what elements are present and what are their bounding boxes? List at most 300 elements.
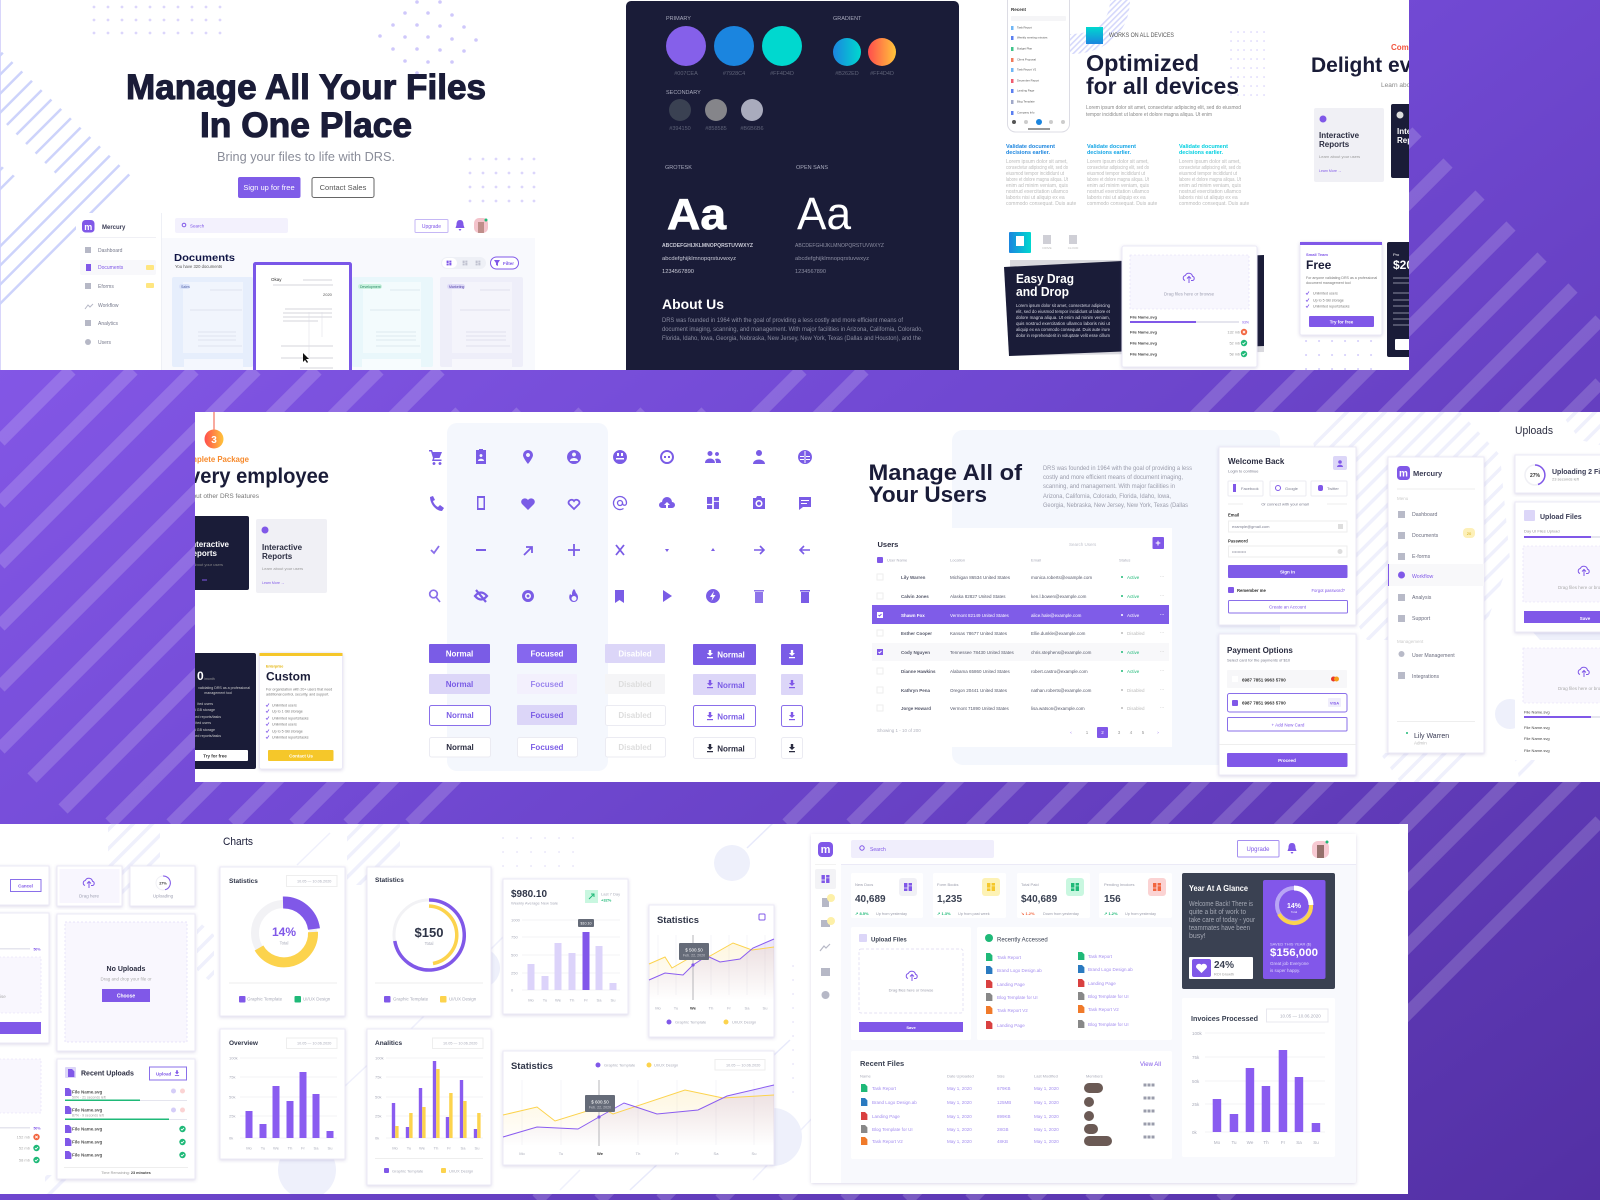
icon: arrow left [800,546,810,554]
recently accessed: Task Report V2 [1088,1007,1119,1012]
sidebar menu: Workflow [98,303,119,309]
row: Cody Nguyen: chris.stephens@example.com [1031,650,1092,655]
row: Jorge Howard: Vermont 71890 United States [950,706,1010,711]
invoices processed: 0k [1192,1130,1198,1135]
row: Jorge Howard [877,705,1164,711]
chart card: analytics: 50k [375,1094,381,1100]
document card: development: Development [360,285,381,289]
row: Lily Warren: Michigan 86534 United States [950,575,1011,580]
ROI tile: ROI Growth [1214,972,1234,976]
optimized body: Lorem ipsum dolor sit amet, consectetur adipiscing elit, sed do eiusmod [1086,105,1241,111]
recent files table: 28GB [997,1127,1009,1132]
row: Kathryn Pena: nathan.roberts@example.com [1031,688,1092,693]
pricing card: pro dark: ited users [197,702,213,706]
login card: Facebook [1241,486,1259,491]
phone mock: Blog Template [1017,100,1035,104]
row: Cody Nguyen: Active [1127,650,1140,655]
typeface: grotesk [662,165,754,275]
chart card: statistics rings: Graphic Template [393,996,429,1002]
chart card: statistics rings: UI/UX Design [449,996,477,1002]
feature column 2: commodo consequat. Duis aute [1087,201,1158,207]
typeface: open sans: ABCDEFGHIJKLMNOPQRSTUVWXYZ [795,243,885,249]
recent files table: Last Modified [1034,1074,1058,1078]
pricing card: enterprise: Up to 1 GB storage [272,710,303,714]
dashboard upload files: Save [906,1025,916,1030]
stat card: new docs: 40,689 [855,894,886,905]
icon: face [660,450,674,464]
feature column 2: nostrud exercitation ullamco [1087,189,1149,195]
card: interactive reports dark: Interactive [1397,127,1438,136]
pricing card: pro clipped [1387,242,1427,357]
icon: cart [429,450,442,465]
sidebar card: Admin [1414,740,1427,746]
pricing card: pro dark: ited reports/tasks [194,715,221,719]
chart card: weekly average sales: Th [570,998,574,1002]
recent files table: Name [860,1074,871,1078]
documents count: You have 320 documents [175,264,222,269]
card: cancel: Cancel [18,884,33,888]
button: sign up: Sign up for free [243,183,295,192]
typeface: open sans: abcdefghijklmnopqrstuvwxyz [795,256,869,262]
chart card: statistics rings [367,867,491,1016]
about us: About Us [662,296,724,312]
payment options card: Select card for the payments of $10 [1227,658,1291,662]
upload files card: Save [1580,616,1591,621]
row: Calvin Jones: ··· [1160,593,1164,598]
invoices processed: Tu [1231,1140,1237,1145]
upload card: 58 mb [1229,352,1240,356]
bar chart: overview [246,1072,334,1138]
recent files table: May 1, 2020 [947,1100,972,1105]
phone mock: Task Report V2 [1017,68,1037,72]
feature column 2: consectetur adipiscing elit, sed do [1087,165,1149,171]
heading: manage users [868,460,1023,507]
chart card: statistics donut: Total [280,940,288,946]
chart card: statistics small line [649,905,774,1037]
upload card: Drag files here or browse [1164,292,1215,296]
pagination: ‹ [1070,730,1072,735]
pricing card: free: Unlimited users [1313,292,1338,296]
dashboard upload files: Drag files here or browse [889,988,934,992]
typeface: open sans: OPEN SANS [796,165,828,171]
dashboard sidebar [811,834,841,1183]
users table: Users [878,540,898,549]
pricing card: enterprise: Up to 5 GB storage [272,730,303,734]
card: interactive reports light: Learn More → [1319,169,1341,173]
users table: User Name [887,558,908,562]
document card: marketing [440,277,523,370]
column: icon and label: Normal [717,650,745,660]
pagination [877,727,1159,738]
recent files table: 48KB [997,1139,1008,1144]
savings tile: $156,000 [1270,947,1318,959]
sidebar card: Analysis [1412,595,1432,601]
upload status card [1515,455,1600,493]
row: Kathryn Pena: Kathryn Pena [901,688,931,693]
card: recent uploads: File Name.svg [72,1090,103,1094]
phone mock: Recent [1011,7,1027,12]
card: no uploads: Choose [117,994,135,1000]
feature column 2: laboris nisi ut aliquip ex ea [1087,195,1146,201]
pricing card: pro clipped: $20 [1393,258,1413,272]
sidebar menu: Users [98,340,112,346]
document card: development [352,277,433,370]
heading: optimized: for all devices [1086,73,1239,99]
stat card: form books: 1,235 [937,894,962,905]
dot grid top [93,6,221,34]
row: Calvin Jones: Active [1127,594,1140,599]
upload card: File Name.svg [1130,340,1157,346]
feature column 3: laboris nisi ut aliquip ex ea [1179,195,1238,201]
chart card: statistics small line: We [690,1006,697,1010]
card: upload progress clipped: ise [0,994,6,999]
card: interactive reports light: Learn about your users [1319,154,1360,159]
sidebar menu [80,237,156,346]
dot diamond [378,0,478,75]
invoices processed [1182,998,1335,1157]
card: interactive reports light: Reports [1319,140,1350,149]
secondary colours: #B6B6B6 [740,126,764,132]
invoices processed: Th [1263,1140,1269,1145]
tooltip: $ 500.50 [685,948,703,952]
sidebar card: Menu [1397,496,1409,501]
recently accessed: Task Report V2 [997,1008,1028,1013]
invoices processed: Sa [1296,1140,1302,1145]
pagination: › [1157,730,1159,735]
donut chart [255,902,314,962]
row: Lily Warren: Active [1127,575,1140,580]
ring chart [394,900,464,970]
chart card: statistics donut: Graphic Template [247,996,283,1002]
column: disabled: Disabled [618,743,652,752]
year at a glance [1182,873,1335,989]
recently accessed: Brand Logo Design.ab [997,968,1042,973]
chart card: statistics wide line: Graphic Template [604,1062,636,1068]
users paragraph: scanning, and management. With major facilities in [1043,483,1175,490]
recent files table: 899KB [997,1114,1011,1119]
title [128,73,486,138]
chart card: weekly average sales: 500 [511,952,518,958]
row: Shawn Fox selected: Vermont 82149 United States [950,613,1010,618]
pricing card: pro dark [160,653,256,769]
pagination: 1 [1086,730,1089,735]
gradient colours: GRADIENT [833,16,862,22]
typeface: open sans: Aa [797,188,852,239]
dashboard header [841,834,1356,865]
card: upload progress clipped: 50% [33,948,41,952]
chart card: overview: 0k [229,1136,233,1140]
heading: optimized: Optimized [1086,50,1199,76]
users table: Location [950,558,965,562]
easy drag and drop dark block: elit, sed do eiusmod tempor incididunt ut labore et [1016,309,1111,315]
delight heading clipped [1311,43,1546,89]
row: Shawn Fox selected: alice.hale@example.com [1031,613,1082,618]
chart card: overview: 10.05 — 10.06.2020 [297,1042,331,1046]
chart card: weekly average sales: 750 [511,934,518,940]
card: recent uploads: Upload [156,1072,172,1076]
stat card: new docs [851,873,923,918]
icon: id badge [476,449,486,464]
pricing card: pro dark: ited reports/tasks [194,734,221,738]
panel: middle row white strip [104,412,1600,782]
chart card: weekly average sales: +32% [601,898,612,902]
icon: cloud upload [659,497,675,508]
chart card: statistics wide line: Th [636,1151,640,1156]
row: Cody Nguyen: Tennessee 78430 United States [950,650,1015,655]
column: normal [429,644,490,757]
tooltip: Feb. 22, 2020 [683,954,705,958]
pricing card: free: Try for free [1330,320,1354,324]
savings tile: Total [1291,910,1297,914]
card: interactive dark: Reports [187,549,218,558]
icon: bell [456,220,464,231]
upload card: 93% [1242,320,1249,324]
pricing card: free: Unlimited reports/tasks [1313,304,1350,308]
stat card: total paid: Down from yesterday [1043,912,1079,916]
dashboard header: Search [870,847,886,853]
chart card: statistics wide line: UI/UX Design [654,1062,678,1068]
bar chart: invoices [1213,1050,1320,1132]
login card: Welcome Back [1228,457,1285,466]
chart card: overview: Sa [314,1146,319,1150]
pagination: Showing 1 - 10 of 200 [877,728,921,733]
drag and drop tabs [1009,232,1079,253]
stat card: new docs: New Docs [855,882,873,887]
pricing card: pro dark: 0 [197,669,204,683]
card: interactive reports dark [1391,104,1438,178]
sidebar menu: Analytics [98,321,119,327]
icon: chat note [799,497,811,510]
feature column 1: Lorem ipsum dolor sit amet, [1006,159,1068,165]
login card: Remember me [1237,588,1267,593]
icon: play [663,590,672,602]
feature column 3: commodo consequat. Duis aute [1179,201,1250,207]
card: recent uploads: 50% · 21 seconds left [72,1096,106,1100]
lower dropzone and file list: File Name.svg [1524,748,1550,753]
chart card: statistics rings: $150 [415,925,443,940]
phone mock: Weekly meeting minutes [1017,36,1048,40]
ROI tile [1189,957,1253,979]
easy drag and drop dark block: Lorem ipsum dolor sit amet, consectetur adipiscing [1016,303,1110,309]
login card: Forgot password? [1311,588,1346,593]
phone mock: Company Info [1017,110,1035,114]
chart card: statistics small line: Statistics [657,915,699,925]
avatar [474,218,488,233]
recent files table: Blog Template for UI [872,1127,913,1132]
recently accessed: Brand Logo Design.ab [1088,967,1133,972]
chart card: statistics donut: 14% [272,925,296,939]
column: disabled: Disabled [618,680,652,689]
button states grid [429,644,803,758]
recent files table: 679KB [997,1086,1011,1091]
row: Shawn Fox selected: Shawn Fox [901,613,925,618]
recent files table: Date Uploaded [947,1074,974,1078]
card: recent uploads: Time Remaining: 23 minutes [101,1171,151,1175]
icon: plus [568,544,580,556]
upload card: 132 mb [1227,330,1240,334]
chart card: statistics small line: Mo [655,1006,662,1010]
chart card: analytics: Su [475,1146,479,1150]
icon: arrow right [754,546,764,554]
pricing card: enterprise: For organization with 20+ users that need [266,688,332,692]
chart card: analytics: 75k [375,1074,381,1080]
lower dropzone and file list: File Name.svg [1524,736,1550,741]
chart card: overview: 50k [229,1094,235,1100]
invoices processed: Fr [1281,1140,1286,1145]
row: Calvin Jones [877,593,1164,599]
card: drag here: Drag here [79,894,100,898]
year at a glance: quite a bit of work to [1189,909,1246,916]
primary colours: PRIMARY [666,16,691,22]
delight heading clipped: Delight every employee [1311,54,1546,77]
pricing card: enterprise: additional control, security, and support. [266,692,329,696]
row: Dianne Hawkins: Alabama 65860 United States [950,669,1011,674]
lower dropzone and file list: File Name.svg [1524,710,1550,714]
column: normal: Normal [446,650,473,658]
recent files table: May 1, 2020 [947,1139,972,1144]
card: recent uploads: Recent Uploads [81,1070,134,1078]
stat card: total paid: Total Paid [1021,882,1039,887]
sidebar card: Lily Warren [1414,733,1449,740]
tooltip: $10.10 [580,922,592,926]
pagination: 5 [1142,730,1145,735]
chart card: analytics: 0k [375,1136,379,1140]
login card: Google [1285,486,1299,491]
chart card: analytics: Mo [392,1146,399,1150]
feature column 1: consectetur adipiscing elit, sed do [1006,165,1068,171]
delight heading clipped: Learn about other DRS features [1381,82,1474,89]
column: disabled [605,644,666,757]
drag and drop tabs: CLOUD [1068,246,1079,250]
icon: person [753,450,765,464]
card: interactive light: Learn More → [262,581,284,585]
pricing card: enterprise: Unlimited users [272,722,297,726]
subtitle: Bring your files to life with DRS. [217,149,395,164]
chart card: statistics wide line: Tu [559,1151,563,1156]
pricing card: enterprise: Contact Us [289,754,313,758]
pricing card: free: Free [1306,258,1332,272]
savings tile: SAVED THIS YEAR ($) [1270,942,1312,946]
icon: caret down [665,549,669,552]
pagination: 3 [1118,730,1121,735]
column: icon only [781,644,803,758]
icon: dashboard tiles [707,497,719,509]
sidebar card: User Management [1412,653,1455,659]
card: drag here [57,866,122,906]
clipped file list: 58 mb [19,1158,31,1162]
column: focused: Focused [531,711,564,720]
stat card: pending invoices: 156 [1104,894,1121,905]
payment options card: Payment Options [1227,646,1293,655]
icon: caret up [711,548,715,551]
card: uploading: Uploading [153,894,174,898]
recent files table: May 1, 2020 [1034,1139,1059,1144]
stat card: total paid [1017,873,1090,918]
recent files table: May 1, 2020 [1034,1127,1059,1132]
recently accessed: Task Report [1088,954,1113,959]
about us: Florida, Idaho, Iowa, Georgia, Nebraska, New Jersey, New York, Texas (Dallas and Houston), and the [662,335,921,342]
card: interactive reports light: Interactive [1319,131,1360,140]
chart card: overview [220,1029,345,1159]
icon: heart [521,498,535,510]
stat card: pending invoices: Up from yesterday [1125,912,1156,916]
card: no uploads: Drag and drop your file or [100,976,152,982]
sidebar card: Workflow [1412,574,1433,580]
heading: optimized [1086,54,1238,94]
pricing card: free [1300,242,1382,335]
card: interactive dark [170,516,249,590]
row: Dianne Hawkins: ··· [1160,668,1164,673]
feature column 1: decisions earlier. [1006,150,1051,156]
sidebar menu: Documents [98,265,124,271]
row: Calvin Jones: Alaska 82827 United States [950,594,1006,599]
payment options card: 6987 7851 9963 5700 [1242,678,1286,682]
icon: trash [800,590,810,603]
users table: Search Users [1069,542,1097,547]
users paragraph: Georgia, Nebraska, New Jersey, New York, Texas (Dallas [1043,502,1189,509]
card: upload progress clipped [0,913,49,1043]
invoices processed: 75k [1192,1055,1200,1060]
feature column 1: laboris nisi ut aliquip ex ea [1006,195,1065,201]
typeface: grotesk: ABCDEFGHIJKLMNOPQRSTUVWXYZ [662,243,754,249]
tooltip: Feb. 22, 2020 [589,1106,611,1110]
dashboard mock [811,834,1356,1183]
step marker 3: 3 [211,435,217,446]
sidebar menu: Eforms [98,284,114,290]
feature column 2: labore et dolore magna aliqua. Ut [1087,177,1150,183]
row: Jorge Howard: Disabled [1127,706,1145,711]
chart card: overview: 75k [229,1074,235,1080]
row: Shawn Fox selected: ··· [1160,612,1164,617]
recent files table: View All [1140,1062,1161,1068]
tooltip: $ 600.50 [591,1100,609,1104]
sidebar menu: Dashboard [98,248,123,254]
invoices processed: Mo [1214,1140,1221,1145]
upload files card: Day UI Files Upload [1524,528,1560,534]
dots below pricing [1306,341,1371,369]
pricing card: free: For anyone validating DRS as a professional [1306,276,1377,280]
column: normal: Normal [446,711,474,720]
login card [1219,447,1356,625]
card: interactive light [256,519,327,593]
easy drag and drop dark block: dolore magna aliqua. Ut enim ad minim veniam, [1016,315,1110,321]
clipped file list [0,1059,41,1163]
recent files table: May 1, 2020 [1034,1114,1059,1119]
year at a glance: Welcome Back! There is [1189,901,1253,908]
optimized body: tempor incididunt ut labore et dolore magna aliqua. Ut enim [1086,112,1212,118]
chart card: overview: Su [328,1146,332,1150]
column: icon and label: Normal [717,712,745,722]
login card: Twitter [1327,486,1339,491]
feature column 2 [1087,144,1158,207]
app mock: documents [76,213,535,372]
upload status card: 27% [1530,473,1541,479]
recent files table: Landing Page [872,1114,900,1119]
view toggle [441,257,486,269]
icon: phone [430,496,444,511]
icon: people [705,451,721,463]
chart card: statistics wide line: We [597,1151,604,1156]
row: Lily Warren [877,574,1164,580]
card: interactive light: Interactive [262,543,303,552]
column: focused: Focused [531,650,564,658]
chart card: analytics: 100k [375,1056,384,1060]
column: focused [517,644,578,757]
tooltip [679,943,709,960]
gradient colours: #B262ED [835,71,859,77]
upload card: File Name.svg [1130,314,1157,320]
icon set [429,449,812,603]
